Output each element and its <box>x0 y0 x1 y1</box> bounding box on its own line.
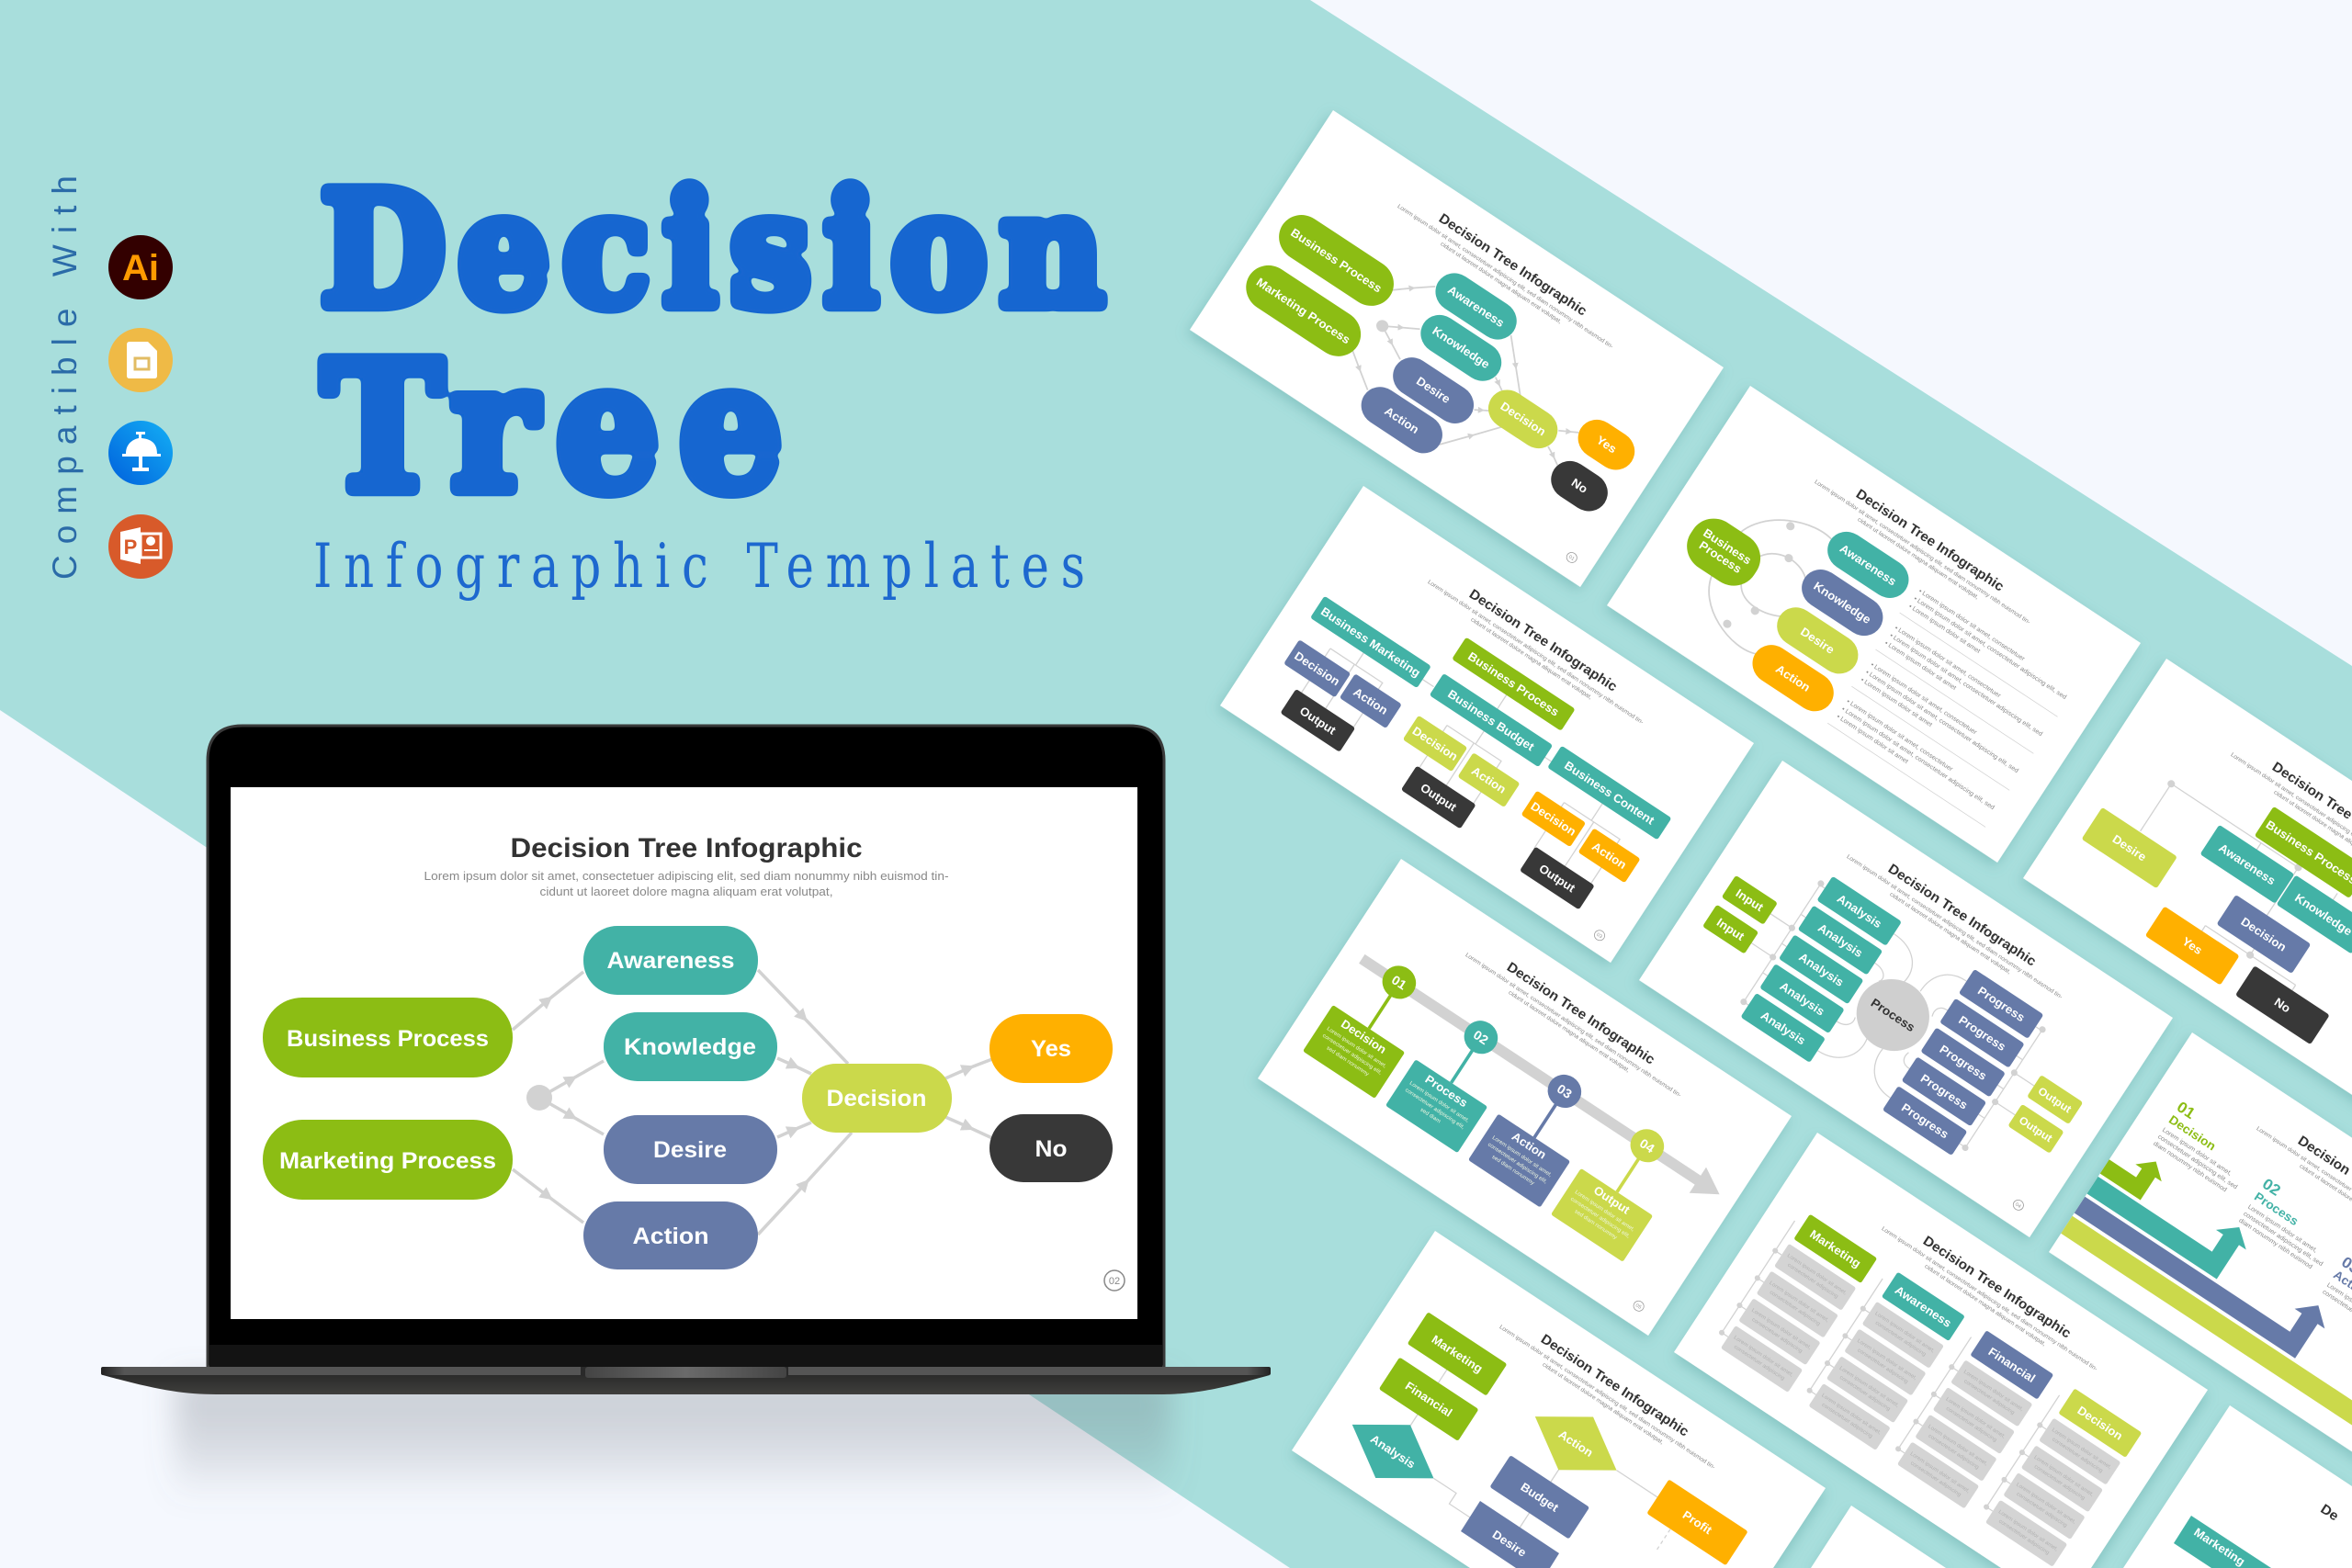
column: Decision: Lorem ipsum dolor sit amet, <box>1997 1509 2059 1552</box>
step text 01: Decision <box>2166 1112 2218 1153</box>
box: Profit: Profit <box>1680 1508 1715 1538</box>
box: Output dark 3: Output <box>1536 862 1578 896</box>
box: Yes <box>2145 906 2240 986</box>
step 01: sed diam nonummy <box>1325 1045 1371 1078</box>
diamond: Analysis: Analysis <box>1368 1432 1418 1471</box>
laptop shadow <box>175 1378 1171 1502</box>
step 01 <box>1303 945 1444 1099</box>
arc connectors <box>1688 494 1836 659</box>
icon: Adobe Illustrator: Ai <box>122 248 159 288</box>
column: Financial: Lorem ipsum dolor sit amet, <box>1927 1424 1988 1467</box>
column: Marketing: consectetuer adipiscing <box>1750 1317 1804 1355</box>
step 03: consectetuer adipiscing elit, <box>1487 1142 1548 1185</box>
box: Analysis 4: Analysis <box>1778 979 1827 1019</box>
slide card: bottom centre partial <box>1811 1506 1946 1568</box>
pill: Business Process: Business Process <box>1288 226 1385 295</box>
box: Analysis 5: Analysis <box>1758 1009 1808 1047</box>
box: Action blue: Action <box>1351 685 1390 717</box>
pill: Knowledge <box>1794 562 1890 643</box>
column: Financial: Financial <box>1986 1345 2038 1385</box>
step text 01: Lorem ipsum dolor sit amet, <box>2161 1127 2233 1178</box>
dashed connector below Profit <box>1657 1529 1670 1551</box>
card title: Lorem ipsum dolor sit amet, consectetuer adipiscing elit, sed diam nonummy nibh euismod tin- <box>1880 1225 2098 1372</box>
step 04: sed diam nonummy <box>1573 1209 1619 1241</box>
box: No: No <box>2272 995 2293 1015</box>
laptop body <box>208 726 1164 1367</box>
box: Output dark <box>1280 689 1355 752</box>
column: Marketing: Lorem ipsum dolor sit amet, <box>1733 1336 1794 1379</box>
box: Yes: Yes <box>2179 934 2205 957</box>
card title: cidunt ut laoreet dolore magna aliquam erat volutpat, <box>1923 1263 2047 1348</box>
pill: No: No <box>1035 1136 1068 1162</box>
pill: Business Process <box>1678 509 1770 595</box>
hub: Process <box>1843 965 1943 1065</box>
card title: Decision Tree Infographic <box>1504 959 1657 1067</box>
box: Budget: Budget <box>1518 1480 1562 1515</box>
page number <box>1592 929 1607 942</box>
box: Analysis 2: Analysis <box>1815 920 1865 960</box>
step text 02: Process <box>2252 1190 2301 1228</box>
title: Decision: Decision <box>320 157 1105 343</box>
step 03: Lorem ipsum dolor sit amet, <box>1491 1135 1553 1179</box>
diamond: Action <box>1518 1390 1634 1496</box>
box: Progress 2 <box>1939 998 2025 1068</box>
box: Analysis 3 <box>1779 934 1864 1004</box>
pill: Knowledge: Knowledge <box>624 1034 756 1060</box>
pill: Awareness: Awareness <box>606 948 735 974</box>
box: Decision lime <box>1403 716 1467 772</box>
column: Decision: consectetuer adipiscing <box>2051 1437 2103 1474</box>
box: Financial <box>1379 1357 1479 1441</box>
box: Knowledge <box>2277 875 2352 954</box>
bullet text group 4: ▪ Lorem ipsum dolor sit amet, consectetuer <box>1845 698 1954 773</box>
card title: cidunt ut laoreet dolore magna aliquam erat volutpat, <box>1439 241 1563 325</box>
pill: Desire: Desire <box>1414 374 1453 406</box>
slide card: rising arrows <box>2049 1032 2352 1509</box>
laptop mockup <box>101 726 1271 1394</box>
card title: Decision Tree Infographic <box>1853 486 2007 594</box>
column: Awareness <box>1800 1266 1965 1451</box>
card title: Lorem ipsum dolor sit amet, consectetuer adipiscing elit, sed diam nonummy nibh euismod tin- <box>1464 952 1682 1099</box>
pill: Yes: Yes <box>1031 1036 1071 1062</box>
bullet text group 1: ▪ Lorem ipsum dolor sit amet, consectetuer adipiscing elit, sed <box>1913 596 2067 701</box>
column: Decision: consectetuer adipiscing <box>1997 1519 2050 1556</box>
pill: Business Process <box>263 998 513 1077</box>
pill: No <box>989 1114 1113 1182</box>
lime stripe <box>2061 1216 2352 1491</box>
column: Financial: Lorem ipsum dolor sit amet, <box>1962 1370 2024 1413</box>
step 04: 04 <box>1637 1135 1657 1156</box>
box: Analysis 5 <box>1740 993 1826 1063</box>
box: Progress 4 <box>1902 1056 1986 1126</box>
box: Profit <box>1646 1479 1748 1565</box>
icon: Google Slides <box>108 328 173 392</box>
card title: Lorem ipsum dolor sit amet, consectetuer adipiscing elit, sed diam nonummy nibh euismod tin- <box>1813 479 2031 626</box>
column: Decision: Lorem ipsum dolor sit amet, <box>2051 1427 2112 1471</box>
column: Awareness: Lorem ipsum dolor sit amet, <box>1820 1393 1882 1437</box>
pill: Desire <box>604 1115 777 1184</box>
pill: Yes: Yes <box>1594 433 1619 456</box>
box: Progress 5 <box>1883 1086 1967 1156</box>
column: Marketing: Lorem ipsum dolor sit amet, <box>1786 1253 1848 1296</box>
page number: 01 <box>1567 555 1575 562</box>
box: Marketing: Marketing <box>1430 1332 1485 1375</box>
step 04: Output <box>1591 1183 1633 1217</box>
pill: Action: Action <box>632 1224 709 1249</box>
box: Input 2 <box>1702 905 1758 954</box>
column: Awareness: Awareness <box>1893 1283 1954 1330</box>
bullet text group 2: ▪ Lorem ipsum dolor sit amet <box>1883 640 1957 692</box>
column: Financial: consectetuer adipiscing <box>1927 1434 1980 1471</box>
step text 01 <box>2152 1098 2262 1198</box>
hub: Process: Process <box>1869 996 1917 1034</box>
pill: Action <box>1354 379 1450 461</box>
column: Financial: Lorem ipsum dolor sit amet, <box>1945 1397 2007 1440</box>
column: Financial: consectetuer adipiscing <box>1962 1379 2015 1416</box>
step 02: 02 <box>1471 1027 1491 1047</box>
column: Awareness: Lorem ipsum dolor sit amet, <box>1856 1338 1917 1382</box>
box: Decision blue <box>1283 639 1351 697</box>
pill: Desire: Desire <box>653 1137 727 1163</box>
box: Decision orange: Decision <box>1529 799 1578 839</box>
box: Analysis 1: Analysis <box>1835 892 1884 931</box>
step text 01: 01 <box>2174 1098 2199 1122</box>
column: Awareness: consectetuer adipiscing <box>1821 1403 1873 1439</box>
step text 02: 02 <box>2259 1175 2284 1200</box>
step text 02 <box>2237 1175 2347 1275</box>
box: Analysis 3: Analysis <box>1796 950 1846 989</box>
page number <box>2011 1198 2026 1213</box>
box: Awareness: Awareness <box>2216 840 2278 887</box>
step 02: Lorem ipsum dolor sit amet, <box>1408 1081 1470 1124</box>
box: Financial: Financial <box>1403 1379 1454 1419</box>
column: Marketing: Marketing <box>1807 1227 1863 1270</box>
card title: Decision Tree Infographic <box>1920 1233 2074 1341</box>
pill: Action: Action <box>1382 404 1421 436</box>
card title: cidunt ut laoreet dolore magna aliquam erat volutpat, <box>1888 891 2012 976</box>
column: Marketing <box>1712 1208 1877 1393</box>
box: Awareness <box>2200 825 2294 904</box>
box: Progress 3 <box>1920 1027 2006 1098</box>
box: Budget <box>1489 1455 1589 1540</box>
box: Output dark: Output <box>1297 704 1339 738</box>
box: Analysis 4 <box>1759 964 1845 1033</box>
box: Desire <box>2082 807 2177 888</box>
pill: Action: Action <box>1773 662 1813 694</box>
card title: Lorem ipsum dolor sit amet, consectetuer adipiscing elit, sed diam nonummy nibh euismod tin- <box>1396 203 1614 350</box>
pill: Knowledge: Knowledge <box>1811 579 1873 626</box>
column: Financial: consectetuer adipiscing <box>1909 1461 1962 1498</box>
box: Action orange: Action <box>1589 840 1629 872</box>
box: Input 1: Input <box>1734 886 1767 914</box>
pill: Awareness: Awareness <box>1445 283 1507 330</box>
box: Analysis 1 <box>1816 876 1902 946</box>
page number: 04 <box>2014 1202 2022 1210</box>
pill: Business Process: Business Process <box>287 1026 489 1052</box>
pill: Desire <box>1770 600 1866 682</box>
pill: Marketing Process: Marketing Process <box>1254 275 1352 346</box>
step 01: Decision <box>1339 1017 1389 1056</box>
column: Awareness: Lorem ipsum dolor sit amet, <box>1838 1366 1900 1409</box>
column: Awareness: Lorem ipsum dolor sit amet, <box>1873 1311 1936 1354</box>
card title: cidunt ut laoreet dolore magna aliquam erat volutpat, <box>1507 989 1631 1074</box>
page number <box>1632 1299 1645 1313</box>
step text 01: diam nonummy nibh euismod <box>2152 1141 2228 1193</box>
step 02 <box>1385 1000 1526 1153</box>
icon: Adobe Illustrator <box>108 235 173 299</box>
slide card: rounded decision tree <box>1190 110 1724 587</box>
step 04: Lorem ipsum dolor sit amet, <box>1574 1190 1635 1233</box>
step text 03 <box>2321 1253 2352 1346</box>
column: Decision <box>1976 1382 2142 1568</box>
page number <box>1565 550 1578 565</box>
timeline arrow <box>1353 946 1728 1207</box>
step 04 <box>1551 1109 1692 1262</box>
card title: cidunt ut laoreet dolore magna aliquam erat volutpat, <box>1541 1361 1665 1446</box>
pill: Decision <box>1481 382 1565 456</box>
step 04: consectetuer adipiscing elit, <box>1569 1197 1631 1240</box>
slide card: arc tree with bullet text <box>1607 386 2141 863</box>
subtitle: Infographic Templates: Infographic Templates <box>313 531 1085 602</box>
slide description: Lorem ipsum dolor sit amet, consectetuer adipiscing elit, sed diam nonummy nibh euismod tin- <box>424 869 948 883</box>
step 03: 03 <box>1555 1081 1575 1101</box>
slide card: four column lists <box>1674 1133 2208 1568</box>
box: Input 2: Input <box>1714 915 1747 943</box>
column: Marketing: consectetuer adipiscing <box>1786 1263 1838 1300</box>
box: Input 1 <box>1722 875 1778 925</box>
hub connectors <box>1720 866 2064 1164</box>
tree connectors <box>2109 751 2352 991</box>
pill: Decision: Decision <box>827 1086 926 1111</box>
box: Decision orange <box>1521 791 1586 847</box>
box: Business Budget <box>1430 673 1553 767</box>
card title: Decision Tree Infographic <box>1538 1331 1691 1439</box>
card title: Decision Tree Infographic <box>1436 210 1589 319</box>
green arrow <box>2100 1139 2169 1204</box>
blue arrow <box>2075 1165 2334 1363</box>
pill: Yes <box>1571 412 1642 478</box>
pill: Decision <box>802 1064 952 1133</box>
pill: Action <box>1745 637 1841 718</box>
connectors <box>1334 265 1602 505</box>
box: Desire <box>1461 1501 1559 1568</box>
card title: Decision Tree Infographic <box>1466 586 1620 694</box>
box: Marketing: Marketing <box>2191 1525 2247 1568</box>
column: Decision: Lorem ipsum dolor sit amet, <box>2033 1455 2095 1498</box>
diamond: Action: Action <box>1556 1427 1596 1460</box>
column: Awareness: consectetuer adipiscing <box>1838 1375 1891 1412</box>
pill: No <box>1544 454 1615 519</box>
slide card: business org chart <box>1220 486 1754 963</box>
step text 02: consectetuer adipiscing elit, sed <box>2242 1211 2324 1268</box>
column: Decision: consectetuer adipiscing <box>2033 1464 2086 1502</box>
page number: 03 <box>1595 932 1603 940</box>
box: Decision lime: Decision <box>1410 724 1460 763</box>
card title: Lorem ipsum dolor sit amet, consectetuer adipiscing elit, sed diam nonummy nibh euismod tin- <box>1498 1324 1716 1471</box>
pill: Marketing Process <box>263 1120 513 1200</box>
pill: Awareness <box>1820 525 1917 605</box>
vertical label: Compatible With: Compatible With <box>46 175 84 580</box>
bullet text group 1: ▪ Lorem ipsum dolor sit amet <box>1907 604 1981 655</box>
box: Action lime <box>1457 752 1521 807</box>
pill: Decision: Decision <box>1498 399 1548 438</box>
box: Output 2: Output <box>2017 1113 2054 1145</box>
column: Marketing: consectetuer adipiscing <box>1733 1345 1785 1382</box>
box: Output 2 <box>2007 1104 2064 1154</box>
screen slide <box>231 787 1137 1319</box>
bullet text group 1: ▪ Lorem ipsum dolor sit amet, consectetuer <box>1917 588 2026 663</box>
box: Output dark 2 <box>1401 765 1476 829</box>
box: Output dark 3 <box>1520 847 1595 909</box>
bullet text group 3: ▪ Lorem ipsum dolor sit amet, consectetuer adipiscing elit, sed <box>1864 670 2019 774</box>
column: Financial: consectetuer adipiscing <box>1945 1406 1997 1443</box>
slide card: flowchart <box>1292 1231 1826 1568</box>
box: Progress 2: Progress <box>1956 1013 2008 1054</box>
box: Business Process: Business Process <box>1465 649 1562 719</box>
pill: Business Process: Process <box>1697 538 1744 576</box>
pill: Marketing Process <box>1238 256 1370 366</box>
diamond: Analysis <box>1335 1398 1451 1505</box>
pill: Business Process <box>1270 206 1403 315</box>
slide description: cidunt ut laoreet dolore magna aliquam erat volutpat, <box>540 885 832 898</box>
step 01: consectetuer adipiscing elit, <box>1321 1033 1383 1077</box>
slide title: Decision Tree Infographic <box>511 833 862 863</box>
step text 02: diam nonummy nibh euismod <box>2237 1218 2313 1270</box>
bracket connectors <box>1301 598 1653 885</box>
box: Business Marketing: Business Marketing <box>1318 604 1423 680</box>
box: Output 1: Output <box>2036 1085 2074 1115</box>
box: Progress 5: Progress <box>1899 1100 1951 1141</box>
column: Financial <box>1888 1324 2053 1509</box>
pill: Yes <box>989 1014 1113 1083</box>
pill: Awareness <box>1428 265 1524 347</box>
icon: PowerPoint: P <box>124 536 137 558</box>
bullet text group 3: ▪ Lorem ipsum dolor sit amet, consectetuer <box>1870 661 1978 737</box>
column: Marketing: Lorem ipsum dolor sit amet, <box>1768 1280 1830 1324</box>
box: Progress 4: Progress <box>1918 1071 1970 1112</box>
box: Business Content: Business Content <box>1562 759 1657 828</box>
pill: Knowledge: Knowledge <box>1430 323 1492 371</box>
box: Output 1 <box>2027 1075 2083 1124</box>
pill: Desire <box>1385 350 1481 431</box>
icon: Keynote <box>108 421 173 485</box>
laptop base <box>101 1367 1271 1394</box>
card title: cidunt ut laoreet dolore magna aliquam erat volutpat, <box>1469 616 1593 701</box>
connectors <box>513 970 992 1235</box>
box: Output dark 2: Output <box>1418 781 1460 815</box>
bullet text group 2: ▪ Lorem ipsum dolor sit amet, consectetuer adipiscing elit, sed <box>1888 633 2043 738</box>
pill: Desire: Desire <box>1798 625 1837 657</box>
pill: Knowledge <box>1413 308 1509 389</box>
icon: PowerPoint <box>108 514 173 579</box>
step 01: Lorem ipsum dolor sit amet, <box>1326 1026 1387 1069</box>
box: Business Budget: Business Budget <box>1445 687 1537 754</box>
bullet text group 4: ▪ Lorem ipsum dolor sit amet, consectetuer adipiscing elit, sed <box>1840 706 1996 811</box>
column: Marketing: consectetuer adipiscing <box>1769 1290 1821 1327</box>
page number <box>1104 1270 1125 1291</box>
box: Progress 3: Progress <box>1938 1043 1989 1083</box>
column: Decision: consectetuer adipiscing <box>2015 1492 2068 1529</box>
box: Marketing <box>2174 1516 2271 1568</box>
column: Marketing: Lorem ipsum dolor sit amet, <box>1750 1308 1812 1351</box>
box: Marketing <box>1408 1312 1507 1396</box>
bullet text group 3: ▪ Lorem ipsum dolor sit amet <box>1860 677 1933 728</box>
page number: 05 <box>1634 1303 1642 1311</box>
pill: Knowledge <box>604 1012 777 1081</box>
card title: De <box>2318 1502 2341 1524</box>
box: Decision: Decision <box>2239 915 2289 954</box>
pill: Awareness <box>583 926 758 995</box>
box: Progress 1 <box>1959 969 2043 1039</box>
box: Action orange <box>1578 828 1641 883</box>
column: Financial: Lorem ipsum dolor sit amet, <box>1909 1451 1971 1495</box>
step 02: sed diam <box>1419 1108 1442 1124</box>
step 03 <box>1468 1054 1610 1208</box>
column: Decision: Decision <box>2075 1404 2125 1443</box>
card title: Lorem ipsum dolor sit amet, consectetuer adipiscing elit, sed diam nonummy nibh euismod tin- <box>1845 853 2064 1000</box>
step 02: Process <box>1423 1072 1470 1110</box>
pill: Awareness: Awareness <box>1838 541 1899 589</box>
box: Action blue <box>1340 673 1402 728</box>
bullet text group 4: ▪ Lorem ipsum dolor sit amet <box>1836 714 1909 765</box>
page number: 02 <box>1109 1276 1120 1287</box>
card title: cidunt ut laoreet dolore magna aliquam erat volutpat, <box>1856 516 1980 601</box>
bullet text group 2: ▪ Lorem ipsum dolor sit amet, consectetuer <box>1894 625 2002 700</box>
slide card: yes/no tree <box>2023 659 2352 1135</box>
box: Progress 1: Progress <box>1975 984 2028 1024</box>
step text 01: consectetuer adipiscing elit, sed <box>2156 1134 2238 1190</box>
column: Decision: Lorem ipsum dolor sit amet, <box>2015 1483 2076 1526</box>
box: Action lime: Action <box>1469 764 1509 796</box>
pill: No: No <box>1569 476 1590 496</box>
slide card: numbered timeline <box>1258 859 1792 1336</box>
box: Analysis 2 <box>1798 906 1883 976</box>
pill: Marketing Process: Marketing Process <box>279 1148 496 1174</box>
box: Decision blue: Decision <box>1292 649 1342 688</box>
step 03: sed diam nonummy <box>1490 1155 1536 1187</box>
slide card: process hub <box>1639 761 2173 1237</box>
box: Business Process <box>1452 637 1576 731</box>
column: Awareness: consectetuer adipiscing <box>1874 1321 1927 1358</box>
step 02: consectetuer adipiscing elit, <box>1404 1088 1465 1131</box>
flow connectors <box>1386 1362 1657 1568</box>
step 03: Action <box>1510 1129 1549 1162</box>
card title: Decision Tree Infographic <box>1885 861 2039 969</box>
teal arrow <box>2087 1147 2255 1284</box>
box: Business Content <box>1547 746 1671 840</box>
box: No <box>2235 965 2330 1044</box>
box: Decision <box>2217 895 2311 974</box>
step text 02: Lorem ipsum dolor sit amet, <box>2246 1204 2318 1254</box>
box: Business Process <box>2255 807 2352 898</box>
slide card: bottom right partial <box>2123 1405 2352 1568</box>
step 01: 01 <box>1389 972 1409 992</box>
pill: Action <box>583 1201 758 1269</box>
slide description <box>424 869 948 898</box>
box: Desire: Desire <box>1490 1528 1529 1560</box>
pill: Business Process: Business <box>1701 525 1754 567</box>
box: Desire: Desire <box>2110 832 2149 863</box>
title: Tree: Tree <box>322 322 783 532</box>
card title: Lorem ipsum dolor sit amet, consectetuer adipiscing elit, sed diam nonummy nibh euismod tin- <box>1426 579 1645 726</box>
column: Awareness: consectetuer adipiscing <box>1856 1348 1909 1385</box>
